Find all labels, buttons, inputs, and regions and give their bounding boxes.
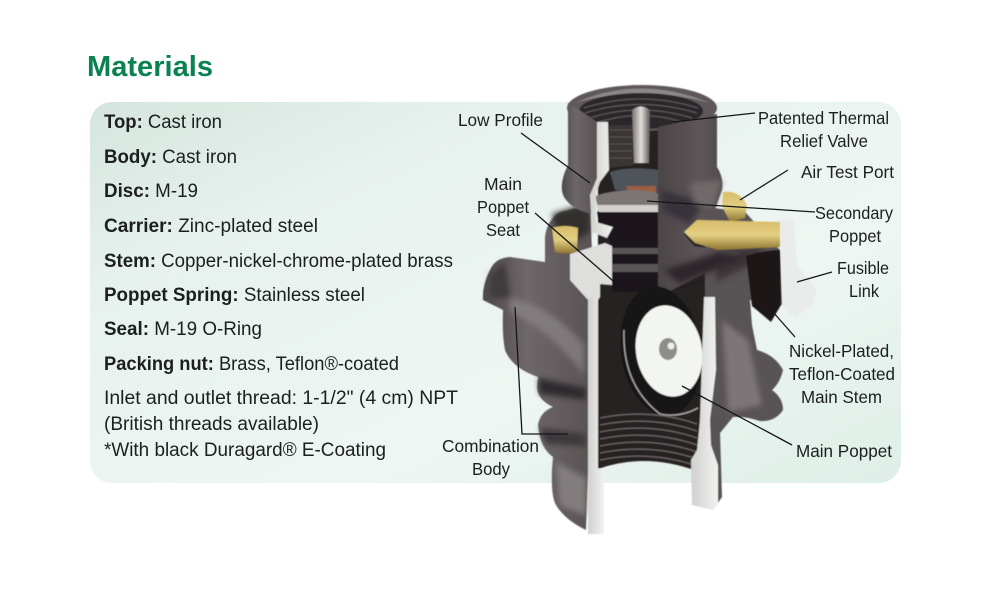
leader lines <box>515 113 832 445</box>
callout labels: Main <box>484 174 522 194</box>
valve: black stem housing <box>746 250 781 322</box>
callout labels: Teflon-Coated <box>789 364 895 384</box>
valve: inner cavity <box>598 120 705 471</box>
callout labels: Air Test Port <box>801 162 894 182</box>
valve: top rim highlight <box>575 88 710 103</box>
callout labels: Combination <box>442 436 539 456</box>
valve: right body shading <box>716 246 765 412</box>
valve: brass air test port <box>722 192 747 222</box>
callout labels: Main Stem <box>801 387 882 407</box>
callout labels: Seat <box>486 220 520 240</box>
valve: left cut wall <box>588 298 604 534</box>
valve: left body casting <box>483 205 594 530</box>
materials list: Inlet and outlet thread: 1-1/2" (4 cm) NPT <box>104 388 458 409</box>
valve: left cut section top <box>590 122 613 238</box>
valve: silver central stem <box>632 106 650 163</box>
panel: materials background <box>90 102 901 483</box>
valve: right cut section <box>691 297 718 510</box>
valve: main poppet disc <box>612 281 710 421</box>
valve: upper threads <box>579 93 703 168</box>
materials list: Disc: M-19 <box>104 181 198 202</box>
valve: brass packing nut <box>684 220 780 250</box>
callout labels: Nickel-Plated, <box>789 341 894 361</box>
materials list: Stem: Copper-nickel-chrome-plated brass <box>104 251 453 272</box>
materials list: Seal: M-19 O-Ring <box>104 319 262 340</box>
callout labels: Body <box>472 459 510 479</box>
callout labels: Link <box>849 281 879 301</box>
valve: hex shading <box>660 180 744 284</box>
valve: top hex left face <box>562 103 597 214</box>
callout labels: Low Profile <box>458 110 543 130</box>
materials list: (British threads available) <box>104 414 319 435</box>
materials list: *With black Duragard® E-Coating <box>104 440 386 461</box>
valve: fusible link <box>780 219 817 318</box>
callout labels: Fusible <box>837 258 889 278</box>
callout labels: Secondary <box>815 203 893 223</box>
materials list: Top: Cast iron <box>104 112 222 133</box>
valve: left body shading <box>490 202 590 516</box>
callout labels: Main Poppet <box>796 441 892 461</box>
valve: secondary poppet stack <box>595 168 658 292</box>
valve: left cut section white block <box>570 243 612 300</box>
callout labels: Poppet <box>477 197 529 217</box>
materials list: Body: Cast iron <box>104 147 237 168</box>
valve: left brass plug <box>552 226 578 254</box>
materials list <box>104 112 458 461</box>
valve: top rim <box>567 85 717 131</box>
valve cutaway illustration <box>483 85 817 534</box>
valve: right body casting <box>690 205 783 510</box>
callout labels: Poppet <box>829 226 881 246</box>
valve: front hex casting right <box>658 114 742 298</box>
callout labels: Relief Valve <box>780 131 868 151</box>
title: Materials <box>87 51 213 83</box>
materials list: Poppet Spring: Stainless steel <box>104 285 365 306</box>
valve: lower threads <box>600 414 697 466</box>
materials list: Packing nut: Brass, Teflon®-coated <box>104 354 399 375</box>
callout labels: Patented Thermal <box>758 108 889 128</box>
callout labels <box>442 108 895 479</box>
materials list: Carrier: Zinc-plated steel <box>104 216 318 237</box>
